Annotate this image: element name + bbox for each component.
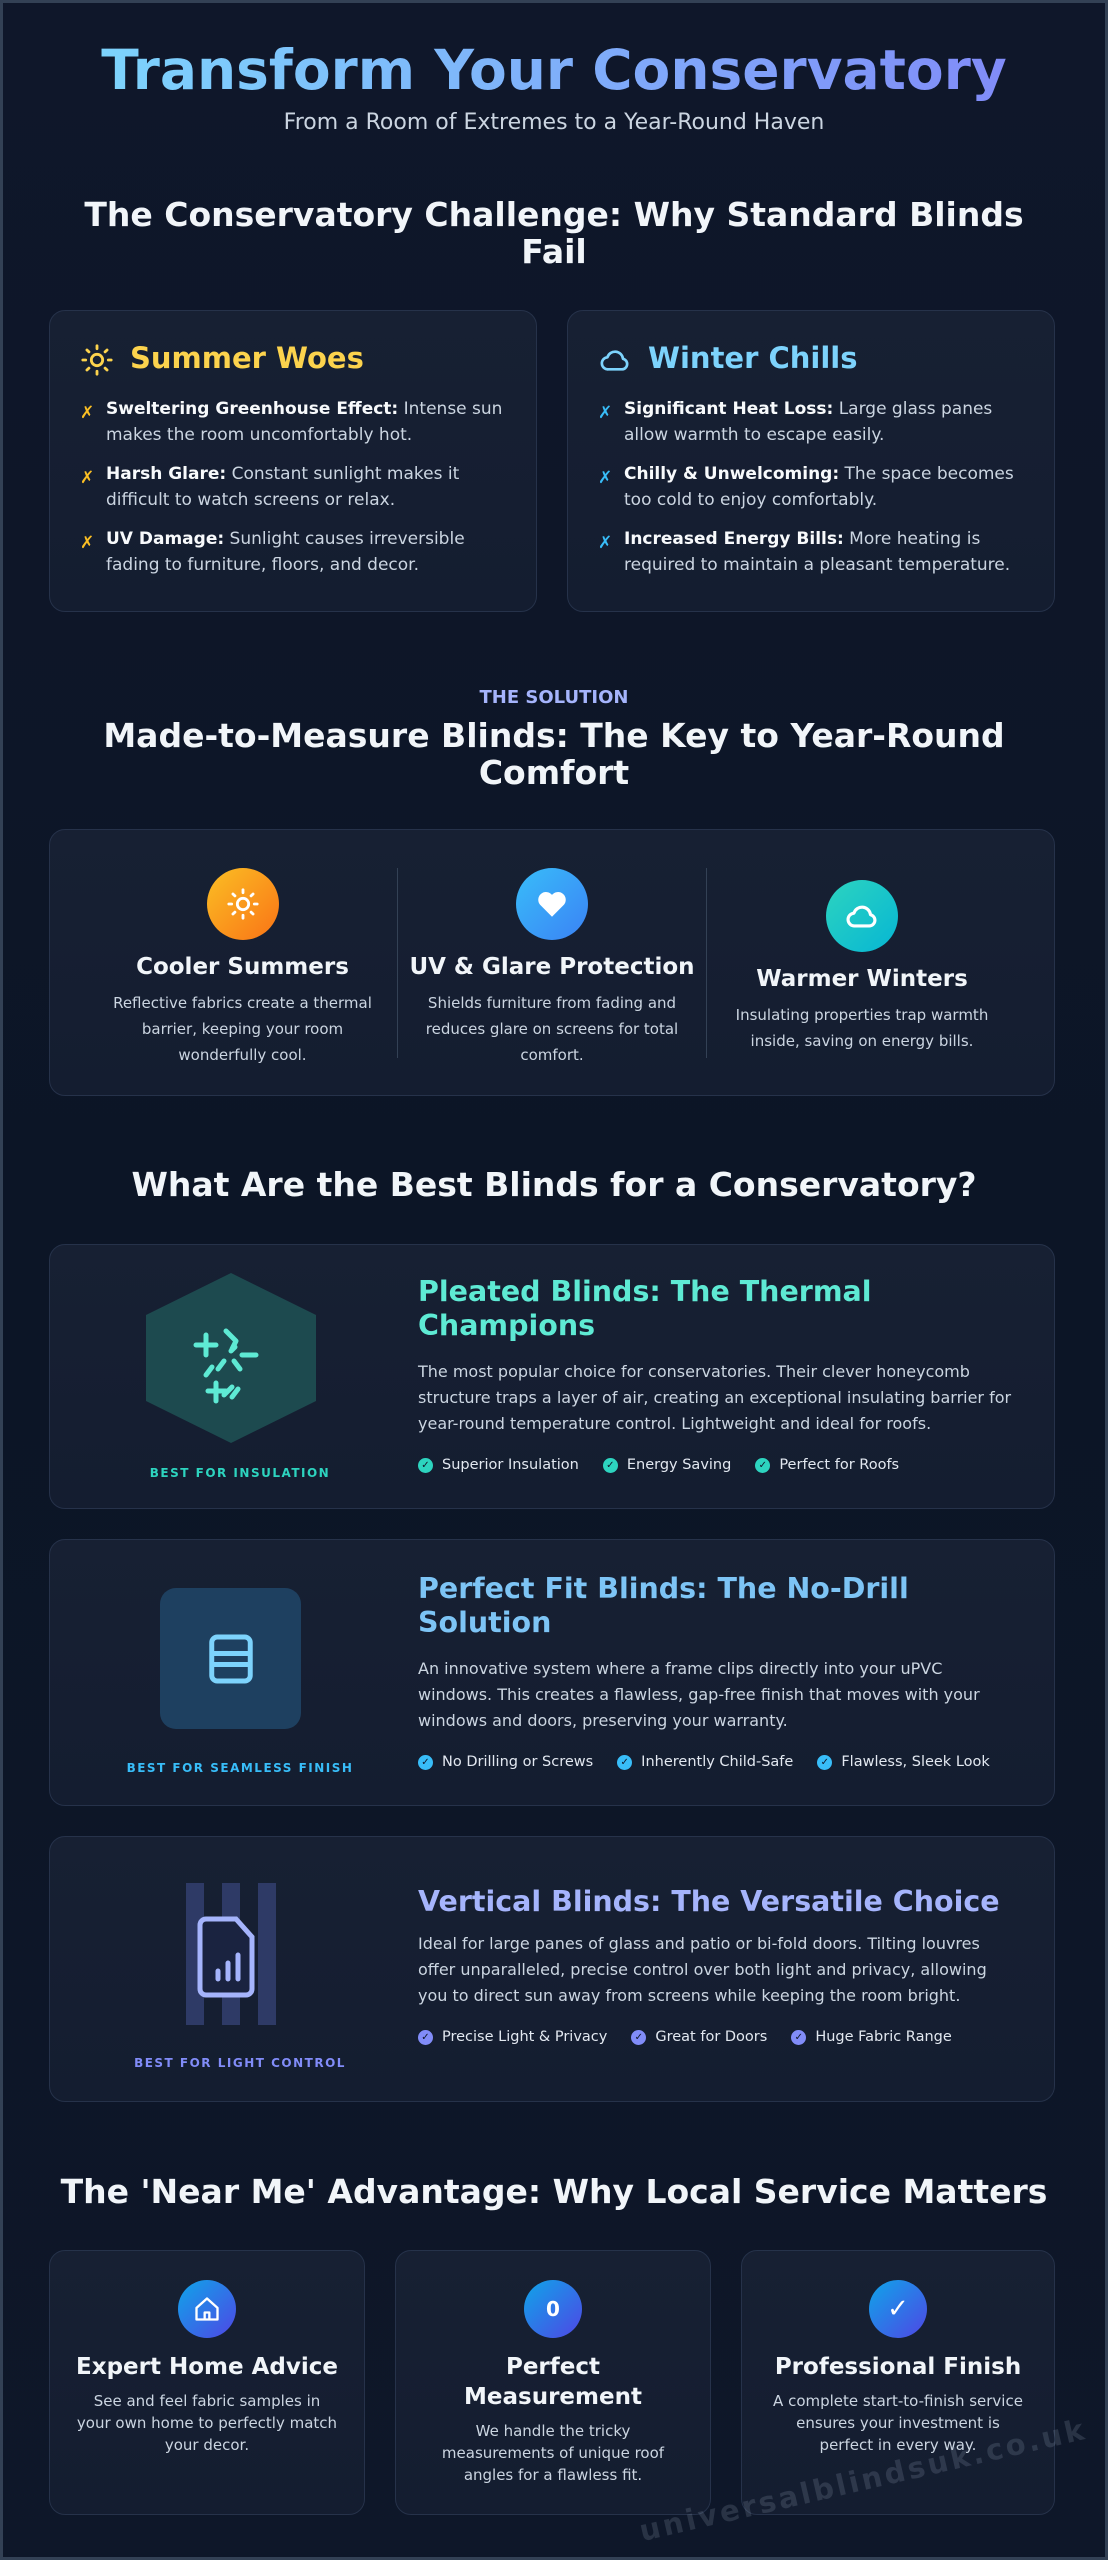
benefit: uv protection [409,868,695,1064]
heading: near me: The 'Near Me' Advantage: Why Local Service Matters [61,2172,1047,2211]
list: summer problems [80,399,502,575]
card: professional finish: A complete start-to-finish service ensures your investment is perfect in every way. [773,2392,1023,2454]
card: perfect measurement [395,2250,711,2515]
text: vertical: ✓ [635,2032,643,2042]
benefit: cooler summers: Cooler Summers [136,954,349,980]
list: winter problems: Significant Heat Loss: Large glass panes allow warmth to escape easily. [624,399,992,445]
heading: summer woes: Summer Woes [130,341,364,375]
text: vertical: Precise Light & Privacy [442,2029,607,2045]
icon: check: ✓ [887,2294,909,2324]
text: perfect fit: No Drilling or Screws [442,1754,593,1770]
text: perfect fit: Inherently Child-Safe [641,1754,793,1770]
text: vertical: Great for Doors [655,2029,767,2045]
card: perfect measurement: Perfect Measurement [464,2354,642,2410]
card: expert home advice [49,2250,365,2515]
list: summer problems: ✗ [80,533,94,553]
label: light control: BEST FOR LIGHT CONTROL [134,2056,346,2070]
icon: cloud circle [826,880,898,952]
text: pleated: ✓ [606,1460,615,1470]
watermark: universalblindsuk.co.uk [636,2412,1090,2548]
list: winter problems: Chilly & Unwelcoming: The space becomes too cold to enjoy comfortably. [624,464,1014,510]
card: perfect measurement: We handle the tricky measurements of unique roof angles for a flawless fit. [442,2422,664,2484]
text: perfect fit: Flawless, Sleek Look [841,1754,990,1770]
icon: hexagon [146,1273,316,1443]
text: perfect fit: An innovative system where a frame clips directly into your uPVC windows. This creates a flawless, gap-free finish that moves with your windows and doors, preserving your warranty. [418,1659,980,1730]
panel: solution benefits [49,829,1055,1096]
text: pleated: ✓ [759,1460,767,1470]
list: summer problems: UV Damage: Sunlight causes irreversible fading to furniture, floors, and decor. [106,529,465,575]
text: perfect fit: Perfect Fit Blinds: The No-Drill Solution [418,1572,909,1639]
benefit: warmer winters: Insulating properties trap warmth inside, saving on energy bills. [736,1006,988,1050]
text: vertical: Ideal for large panes of glass and patio or bi-fold doors. Tilting louvres offer unparalleled, precise control over both light and privacy, allowing you to direct sun away from screens while keeping the room bright. [418,1934,987,2005]
card: professional finish [741,2250,1055,2515]
list: winter problems: Increased Energy Bills: More heating is required to maintain a pleasant temperature. [624,529,1010,575]
icon: sun [81,344,113,376]
heading: winter chills: Winter Chills [648,341,858,375]
card: professional finish: Professional Finish [775,2354,1021,2380]
list: summer problems: Harsh Glare: Constant sunlight makes it difficult to watch screens or relax. [106,464,459,510]
icon: heart circle [516,868,588,940]
panel: summer woes [49,310,537,612]
benefit: uv protection: UV & Glare Protection [409,954,695,980]
eyebrow: the solution: THE SOLUTION [480,687,628,708]
panel: winter chills [567,310,1055,612]
icon: cloud [600,350,628,371]
benefit: warmer winters: Warmer Winters [756,966,968,992]
list: winter problems [598,399,1014,575]
icon: measure: 0 [546,2297,560,2321]
list: summer problems: Sweltering Greenhouse Effect: Intense sun makes the room uncomfortably hot. [106,399,502,445]
text: vertical: Vertical Blinds: The Versatile Choice [418,1885,1000,1918]
benefit: uv protection: Shields furniture from fading and reduces glare on screens for total comfort. [426,994,678,1064]
text: perfect fit [418,1572,990,1770]
text: perfect fit: ✓ [620,1756,629,1768]
list: winter problems: ✗ [598,533,612,553]
text: pleated: ✓ [421,1460,430,1470]
panel: perfect fit blinds [49,1539,1055,1806]
card: expert home advice: Expert Home Advice [76,2354,338,2380]
icon: house [178,2280,236,2338]
text: pleated: The most popular choice for conservatories. Their clever honeycomb structure traps a layer of air, creating an exceptional insulating barrier for year-round temperature control. Lightweight and ideal for roofs. [418,1362,1011,1433]
text: pleated [418,1275,1012,1473]
label: seamless finish: BEST FOR SEAMLESS FINISH [127,1761,353,1775]
title: Transform Your Conservatory [101,38,1007,102]
text: vertical: Huge Fabric Range [815,2029,952,2045]
text: pleated: Energy Saving [627,1457,731,1473]
heading: challenge: The Conservatory Challenge: Why Standard Blinds Fail [84,195,1024,271]
list: winter problems: ✗ [598,468,612,488]
heading: solution: Made-to-Measure Blinds: The Key to Year-Round Comfort [103,716,1005,792]
benefit: warmer winters [736,880,988,1050]
icon: sun circle [206,868,278,940]
heading: best blinds: What Are the Best Blinds for a Conservatory? [131,1165,977,1204]
panel: pleated blinds [49,1244,1055,1509]
list: winter problems: ✗ [598,403,612,423]
text: pleated: Pleated Blinds: The Thermal Champions [418,1275,872,1342]
panel: vertical blinds [49,1836,1055,2102]
text: perfect fit: ✓ [421,1756,430,1768]
text: pleated: Superior Insulation [442,1457,579,1473]
subtitle: From a Room of Extremes to a Year-Round Haven [284,110,824,135]
benefit: cooler summers: Reflective fabrics create a thermal barrier, keeping your room wonderfully cool. [113,994,372,1064]
icon: check [869,2280,927,2338]
benefit: cooler summers [113,868,372,1064]
icon: measure [524,2280,582,2338]
text: perfect fit: ✓ [821,1756,829,1768]
list: summer problems: ✗ [80,468,94,488]
text: vertical [418,1885,1000,2045]
icon: perfect fit [160,1588,301,1729]
list: summer problems: ✗ [80,403,94,423]
icon: vertical blinds [186,1883,276,2025]
text: pleated: Perfect for Roofs [779,1457,899,1473]
label: best for insulation: BEST FOR INSULATION [150,1466,330,1480]
card: expert home advice: See and feel fabric samples in your own home to perfectly match your decor. [77,2392,337,2454]
text: vertical: ✓ [795,2032,803,2042]
text: vertical: ✓ [421,2032,430,2042]
